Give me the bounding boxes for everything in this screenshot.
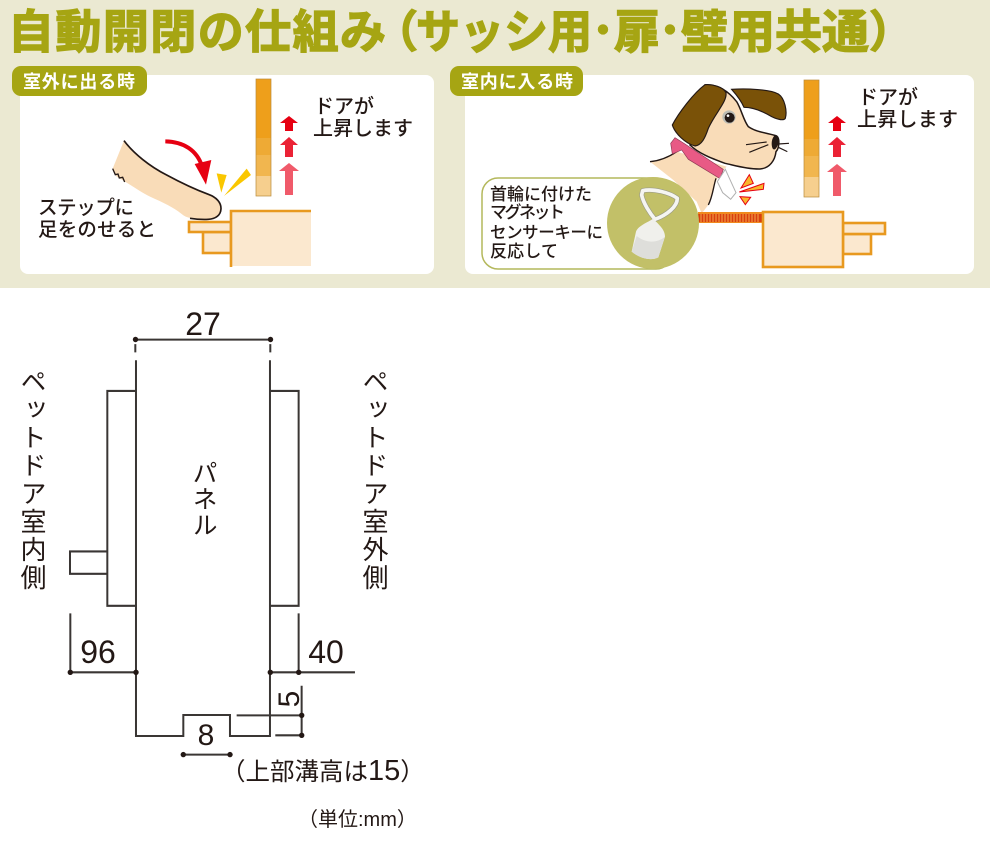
nose (772, 135, 779, 150)
callout text: マグネット (490, 203, 565, 222)
dimension 96: 96 (80, 634, 116, 670)
door panel rising (804, 80, 819, 197)
title: 扉 (614, 6, 660, 58)
title: 自動開閉の仕組み (8, 6, 386, 58)
foot (113, 141, 221, 219)
callout text: 反応して (490, 242, 558, 261)
label: panel: パネル (189, 460, 217, 538)
header band (0, 0, 990, 288)
tab heading (450, 66, 583, 96)
tab heading (12, 66, 147, 96)
eye (722, 110, 736, 124)
panel: coming indoors (450, 66, 974, 274)
sparks (741, 175, 753, 188)
label: door rises: 上昇します (857, 108, 958, 131)
sensor strip (698, 212, 764, 223)
label: door rises (313, 95, 413, 140)
dimension 40: 40 (308, 634, 344, 670)
label: outdoor side: ペットドア室外側 (359, 368, 389, 592)
dimension 5: 5 (273, 691, 306, 707)
label: indoor side: ペットドア室内側 (17, 368, 47, 592)
note: top groove height: （上部溝高は15） (221, 755, 425, 787)
callout text: 首輪に付けた (490, 185, 592, 204)
tab heading: 室外に出る時 (23, 72, 135, 92)
note: unit: （単位:mm） (298, 808, 417, 831)
impact marks (217, 169, 251, 196)
door panel rising (256, 79, 271, 196)
panel outline (70, 340, 355, 755)
title (8, 5, 913, 58)
label: put foot on step (38, 197, 156, 241)
title: （ (374, 8, 418, 57)
label: door rises: ドアが (858, 86, 918, 109)
dimension 8: 8 (198, 719, 214, 752)
dimension diagram (17, 306, 425, 831)
head (690, 85, 779, 169)
callout text (490, 185, 603, 261)
callout: magnetic sensor key (482, 177, 699, 269)
title: サッシ用 (416, 6, 592, 58)
title: ･ (658, 5, 682, 57)
label: door rises (857, 86, 958, 131)
title: ･ (592, 5, 614, 57)
neck (650, 152, 727, 213)
panel background (20, 75, 434, 274)
title: 壁用共通 (681, 6, 869, 58)
panel background (465, 75, 974, 274)
whiskers (746, 142, 789, 152)
label: put foot on step: 足をのせると (38, 219, 156, 241)
dimension 27: 27 (185, 306, 221, 342)
red motion arrow (165, 141, 211, 185)
collar (671, 138, 723, 179)
magnet key (632, 190, 677, 259)
tab heading: 室内に入る時 (461, 72, 573, 92)
ears (732, 89, 786, 120)
arrows up (279, 116, 299, 195)
step unit (189, 211, 311, 267)
dog (650, 85, 789, 213)
title: ） (869, 8, 913, 57)
arrows up (827, 116, 847, 196)
callout text: センサーキーに (490, 224, 603, 242)
tag (717, 169, 736, 199)
label: put foot on step: ステップに (38, 197, 134, 219)
magnified circle (607, 177, 699, 269)
label: door rises: 上昇します (313, 117, 413, 140)
step unit (763, 212, 885, 267)
dimension points (68, 337, 304, 757)
label: door rises: ドアが (314, 95, 374, 118)
panel: going outdoors (12, 66, 434, 274)
